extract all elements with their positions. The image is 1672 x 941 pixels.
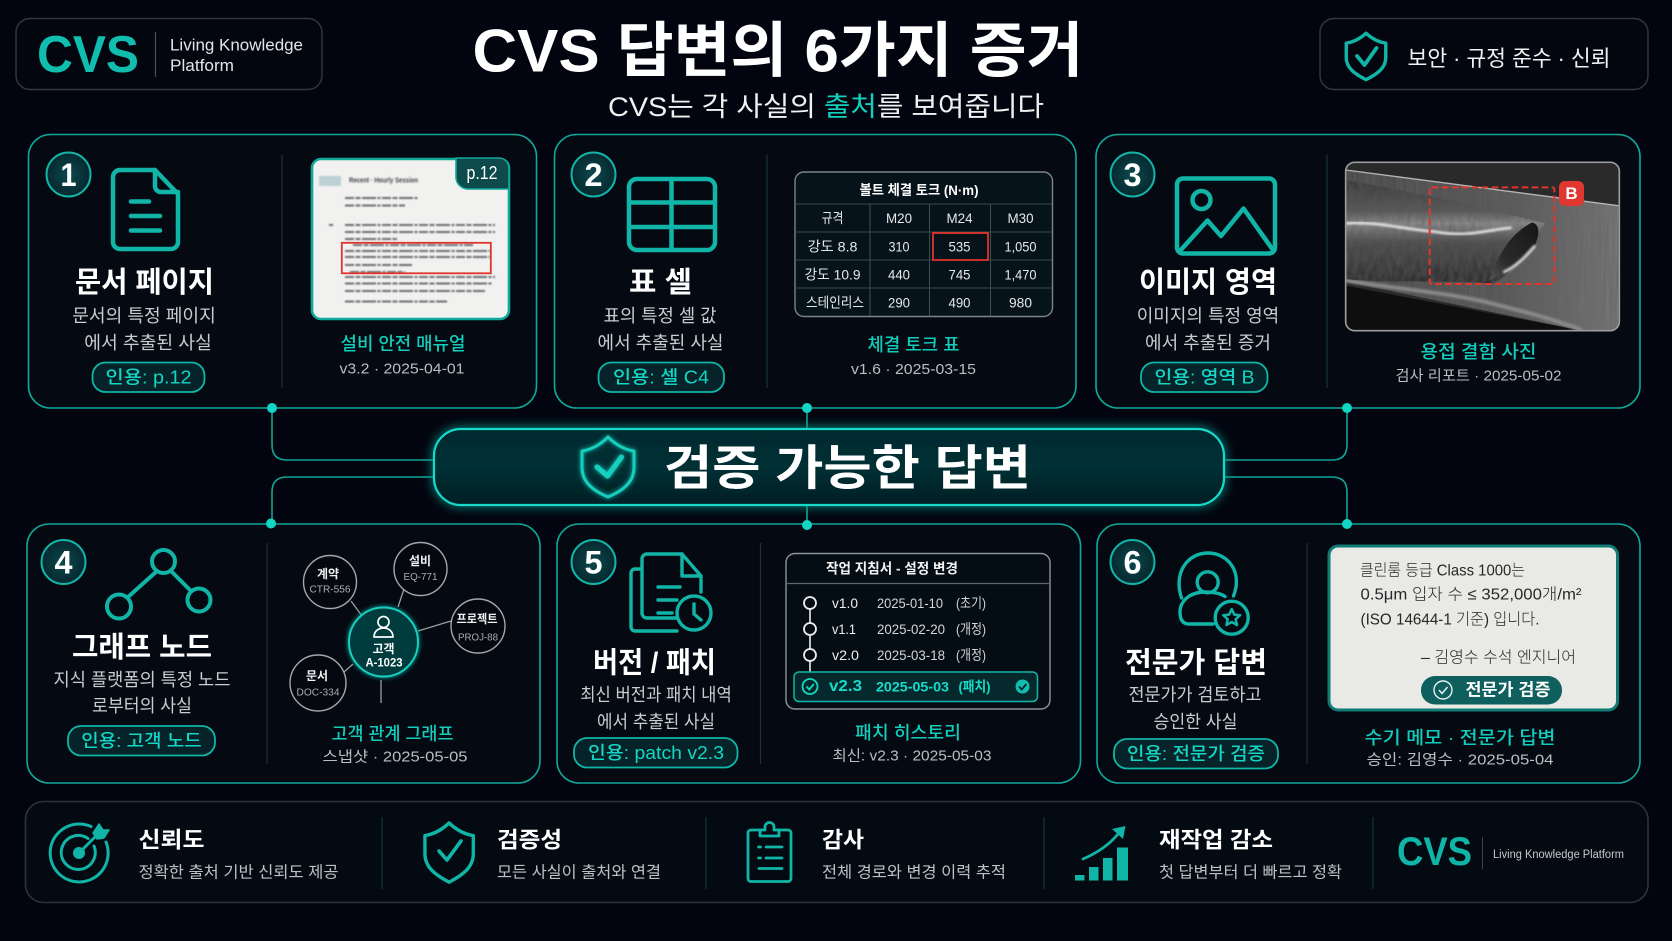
panel 6: expert answer	[1097, 524, 1640, 783]
handwritten note: 0.5μm 입자 수 ≤ 352,000개/m²	[1360, 586, 1582, 604]
central banner: verifiable answer	[434, 429, 1224, 505]
torque table: 1,470	[1004, 266, 1037, 282]
torque table: 310	[888, 238, 910, 254]
benefit: verifiability: 검증성	[497, 828, 562, 852]
source caption	[832, 723, 992, 764]
description: 에서 추출된 사실	[597, 712, 715, 732]
icon: versioned document with clock	[631, 554, 711, 631]
node: contract: CTR-556	[310, 584, 351, 596]
torque table: 745	[948, 266, 971, 282]
heading: 표 셀: 표 셀	[629, 266, 692, 299]
source caption: 수기 메모 · 전문가 답변	[1364, 728, 1556, 748]
source caption	[322, 724, 468, 766]
footer logo	[1397, 830, 1624, 874]
source caption: 스냅샷 · 2025-05-05	[322, 748, 468, 766]
citation pill	[92, 362, 204, 392]
description: 승인한 사실	[1154, 712, 1238, 732]
patch history box: 작업 지침서 - 설정 변경	[826, 560, 958, 576]
logo box: CVS	[37, 26, 139, 84]
source caption: 패치 히스토리	[855, 723, 961, 743]
current version row	[794, 672, 1038, 702]
logo box	[16, 18, 322, 90]
description: 표의 특정 셀 값	[604, 306, 716, 326]
description: 문서의 특정 페이지	[72, 306, 216, 326]
torque table	[795, 172, 1052, 316]
torque table: 535	[948, 238, 971, 254]
torque table: 볼트 체결 토크 (N·m)	[860, 182, 978, 198]
benefit: verifiability	[425, 823, 661, 882]
number badge 5: 5	[584, 544, 602, 580]
panel 5: version / patch	[557, 524, 1080, 783]
source caption: 최신: v2.3 · 2025-05-03	[832, 748, 992, 764]
source caption: 설비 안전 매뉴얼	[340, 334, 466, 354]
citation pill: 인용: 셀 C4	[613, 368, 709, 388]
node: equipment: EQ-771	[404, 571, 438, 583]
patch history box	[786, 554, 1050, 709]
node: contract	[304, 556, 356, 608]
source caption: v1.6 · 2025-03-15	[851, 361, 976, 378]
document page thumbnail	[312, 158, 509, 319]
number badge 2	[572, 152, 616, 196]
benefit: verifiability: 모든 사실이 출처와 연결	[497, 864, 661, 882]
expert verified stamp: 전문가 검증	[1466, 680, 1550, 700]
number badge 4	[42, 540, 86, 584]
node: equipment	[394, 542, 447, 596]
icon: expert	[1179, 553, 1248, 634]
number badge 5	[572, 540, 616, 584]
torque table: M20	[886, 210, 912, 226]
number badge 1	[46, 152, 90, 196]
patch history box: (개정)	[956, 621, 986, 637]
torque table: 규격	[822, 210, 844, 226]
description	[1137, 306, 1279, 353]
footer logo: CVS	[1397, 830, 1472, 874]
node: document: 문서	[306, 669, 328, 683]
number badge 1: 1	[60, 157, 76, 193]
benefit: audit: 감사	[822, 828, 864, 852]
torque table: 강도 8.8	[808, 238, 858, 254]
patch history box: v2.0	[832, 647, 859, 663]
node: contract: 계약	[317, 567, 339, 581]
citation pill: 인용: p.12	[106, 368, 192, 388]
panel 4: graph node	[27, 524, 540, 783]
number badge 3	[1110, 152, 1154, 196]
benefit: less rework	[1075, 826, 1342, 882]
description: 로부터의 사실	[92, 696, 192, 716]
source caption: 검사 리포트 · 2025-05-02	[1396, 368, 1562, 384]
description: 에서 추출된 사실	[84, 333, 212, 353]
handwritten note: (ISO 14644-1 기준) 입니다.	[1360, 610, 1540, 628]
number badge 6	[1110, 540, 1154, 584]
description	[54, 670, 230, 716]
description: 이미지의 특정 영역	[1137, 306, 1279, 326]
icon: shield check	[582, 437, 634, 497]
torque table: 강도 10.9	[804, 266, 861, 282]
source caption: 고객 관계 그래프	[332, 724, 454, 744]
source caption: 용접 결함 사진	[1420, 342, 1536, 362]
torque table: 스테인리스	[806, 294, 864, 310]
patch history box: v1.1	[832, 621, 856, 637]
description	[72, 306, 216, 353]
source caption	[851, 335, 976, 378]
icon: graph	[107, 550, 210, 618]
panel 1: document page	[28, 134, 536, 408]
patch history box: (초기)	[956, 595, 986, 611]
description: 에서 추출된 사실	[598, 333, 724, 353]
node: project: 프로젝트	[456, 612, 498, 626]
icon: table	[629, 179, 715, 250]
current version row: v2.3	[829, 678, 862, 695]
weld defect photo: B	[1565, 184, 1578, 203]
torque table: M30	[1008, 210, 1034, 226]
weld defect photo	[1346, 162, 1619, 331]
torque table: 290	[888, 294, 910, 310]
patch history box: v1.0	[832, 595, 858, 611]
node: project: PROJ-88	[458, 632, 498, 644]
benefit: less rework: 첫 답변부터 더 빠르고 정확	[1159, 864, 1342, 882]
citation pill: 인용: 전문가 검증	[1127, 744, 1265, 764]
logo box: Platform	[170, 56, 234, 75]
heading: 그래프 노드: 그래프 노드	[72, 631, 212, 664]
description: 지식 플랫폼의 특정 노드	[54, 670, 230, 690]
bottom benefits bar	[26, 802, 1648, 902]
heading: 문서 페이지: 문서 페이지	[75, 266, 214, 299]
subtitle: CVS는 각 사실의 출처를 보여줍니다	[608, 92, 1044, 122]
benefit: less rework: 재작업 감소	[1159, 828, 1273, 852]
node: document: DOC-334	[296, 686, 340, 698]
handwritten note	[1329, 546, 1618, 710]
node: document	[290, 655, 346, 711]
document page thumbnail: Recent · Hourly Session	[349, 176, 418, 184]
relationship graph	[290, 542, 505, 711]
patch history box: 2025-01-10	[877, 595, 943, 611]
citation pill	[1114, 739, 1278, 768]
node: equipment: 설비	[409, 554, 431, 568]
center node	[349, 608, 418, 676]
number badge 2: 2	[584, 157, 602, 193]
heading: 버전 / 패치: 버전 / 패치	[593, 646, 716, 680]
icon: document	[113, 170, 178, 249]
handwritten note: 클린룸 등급 Class 1000는	[1360, 562, 1525, 580]
heading: 이미지 영역: 이미지 영역	[1139, 266, 1277, 299]
citation pill: 인용: patch v2.3	[588, 743, 724, 763]
logo box: Living Knowledge	[170, 36, 303, 54]
source caption	[1396, 342, 1562, 384]
title: CVS 답변의 6가지 증거	[472, 18, 1084, 84]
source caption	[1364, 728, 1556, 768]
current version row: (패치)	[958, 678, 990, 694]
number badge 4: 4	[54, 544, 73, 580]
source caption: 체결 토크 표	[868, 335, 960, 355]
description: 에서 추출된 증거	[1145, 333, 1271, 353]
panel 2: table cell	[554, 134, 1076, 408]
source caption: 승인: 김영수 · 2025-05-04	[1366, 752, 1554, 768]
citation pill	[68, 726, 215, 756]
torque table: 490	[948, 294, 971, 310]
torque table: 440	[888, 266, 910, 282]
citation pill: 인용: 영역 B	[1154, 368, 1254, 388]
benefit: reliability	[50, 824, 338, 882]
expert verified stamp	[1421, 676, 1562, 704]
citation pill	[574, 738, 738, 768]
panel 3: image region	[1096, 134, 1640, 408]
benefit: reliability: 정확한 출처 기반 신뢰도 제공	[138, 864, 338, 882]
document page thumbnail: p.12	[466, 163, 498, 183]
center node: 고객	[372, 642, 395, 656]
current version row: 2025-05-03	[876, 678, 949, 694]
number badge 6: 6	[1124, 544, 1142, 580]
benefit: reliability: 신뢰도	[138, 828, 204, 852]
banner text: 검증 가능한 답변	[664, 442, 1031, 496]
benefit: audit: 전체 경로와 변경 이력 추적	[822, 864, 1006, 882]
node: project	[451, 599, 505, 653]
number badge 3: 3	[1124, 157, 1142, 193]
description	[580, 685, 732, 732]
citation pill	[598, 362, 724, 392]
description: 최신 버전과 패치 내역	[580, 685, 732, 705]
heading: 전문가 답변: 전문가 답변	[1125, 646, 1267, 680]
patch history box: (개정)	[956, 647, 986, 663]
source caption: v3.2 · 2025-04-01	[340, 360, 464, 378]
icon: image	[1177, 178, 1275, 254]
connectors	[272, 408, 1347, 525]
connector nodes	[266, 403, 1352, 530]
description: 전문가가 검토하고	[1128, 685, 1262, 705]
handwritten note: – 김영수 수석 엔지니어	[1421, 648, 1576, 666]
citation pill	[1141, 362, 1268, 392]
citation pill: 인용: 고객 노드	[81, 731, 202, 751]
patch history box: 2025-03-18	[877, 647, 945, 663]
security badge	[1320, 18, 1648, 90]
torque table: 1,050	[1004, 238, 1037, 254]
footer logo: Living Knowledge Platform	[1493, 849, 1624, 861]
description	[1128, 685, 1262, 732]
patch history box: 2025-02-20	[877, 621, 945, 637]
torque table: 980	[1009, 294, 1032, 310]
center node: A-1023	[366, 656, 403, 670]
security badge: 보안 · 규정 준수 · 신뢰	[1408, 46, 1610, 71]
benefit: audit	[748, 823, 1006, 882]
description	[598, 306, 724, 353]
torque table: M24	[946, 210, 973, 226]
source caption	[340, 334, 466, 378]
